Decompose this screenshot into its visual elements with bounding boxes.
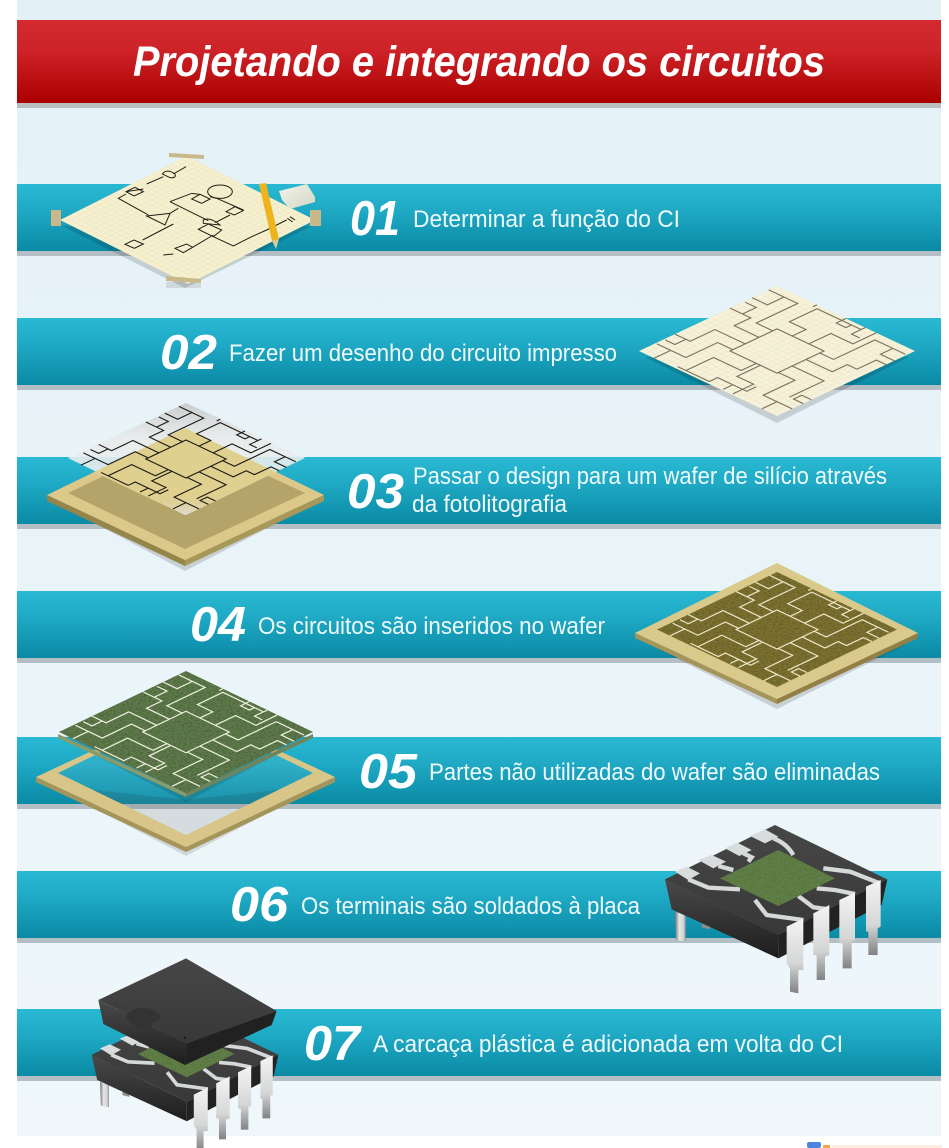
step 1 number: 01 — [350, 192, 400, 246]
photomask — [68, 403, 305, 515]
illustration: schematic on graph paper — [51, 153, 321, 288]
step 3 band — [17, 457, 941, 529]
step 7 text: A carcaça plástica é adicionada em volta do CI — [373, 1031, 843, 1058]
step 4 number: 04 — [190, 598, 246, 652]
illustration: circuit layout on paper — [639, 286, 915, 423]
step 4 band — [17, 591, 941, 663]
illustration: terminals soldered to chip — [665, 825, 887, 993]
step 2 number: 02 — [160, 326, 217, 380]
step 7 band — [17, 1009, 941, 1081]
icon: cropped footer logo — [807, 1142, 942, 1148]
step 6 text: Os terminais são soldados à placa — [301, 893, 641, 920]
illustration: unused wafer parts removed — [36, 671, 335, 856]
step 2 band — [17, 318, 941, 390]
step 3 text: Passar o design para um wafer de silício através — [413, 463, 887, 490]
title: Projetando e integrando os circuitos — [133, 38, 825, 86]
step 7 number: 07 — [304, 1017, 363, 1071]
icon: eraser — [279, 184, 315, 209]
step 2 text: Fazer um desenho do circuito impresso — [229, 340, 617, 367]
green wafer plate — [58, 671, 313, 802]
wafer — [47, 428, 324, 566]
tape pieces — [51, 153, 321, 283]
plastic lid — [98, 958, 277, 1065]
title banner — [17, 20, 941, 108]
wafer frame — [36, 707, 335, 852]
step 4 text: Os circuitos são inseridos no wafer — [258, 613, 605, 640]
step 5 band — [17, 737, 941, 809]
schematic drawing — [118, 167, 295, 255]
step 3 text — [412, 463, 887, 518]
step 3 number: 03 — [347, 465, 404, 519]
lower chip — [92, 1009, 278, 1148]
step 5 text: Partes não utilizadas do wafer são eliminadas — [429, 759, 880, 786]
hole shading — [58, 711, 313, 835]
icon: pencil — [259, 183, 279, 249]
step 6 band — [17, 871, 941, 943]
illustration: plastic casing over chip — [92, 958, 278, 1148]
step 1 text: Determinar a função do CI — [413, 206, 680, 233]
step 6 number: 06 — [230, 878, 289, 932]
step 1 band — [17, 184, 941, 256]
illustration: circuits inserted in wafer — [635, 563, 918, 709]
step 5 number: 05 — [359, 745, 418, 799]
step 3 text: da fotolitografia — [412, 491, 568, 518]
illustration: photolithography on wafer — [47, 403, 324, 571]
